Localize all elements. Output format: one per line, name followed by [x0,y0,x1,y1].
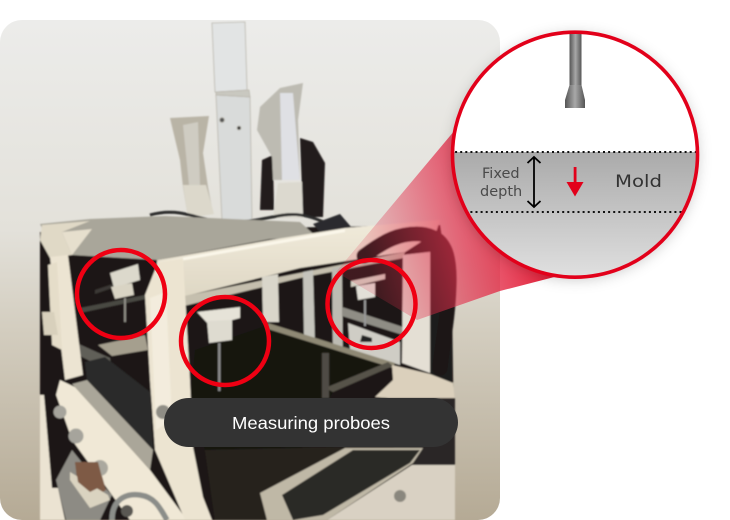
label: mold: Mold [615,172,662,192]
center post [145,258,212,520]
hoses on top [148,210,324,222]
left post [50,255,83,380]
circle: probe 1 [77,250,165,338]
center mold [190,323,395,450]
magnified detail circle [450,32,700,282]
left bag [170,116,214,218]
drag chain [260,138,325,217]
cable loop [364,234,449,368]
right bag [257,83,303,218]
floor right [375,365,455,402]
probe [565,32,585,108]
red down arrow [566,167,584,196]
top plate [40,216,318,260]
label: fixed depth: Fixed [482,166,520,182]
lower right mold [205,447,455,520]
central tower [212,22,252,220]
mold block [450,152,700,282]
bolts and bracket [54,406,167,520]
machine dark body [40,225,455,520]
red zoom cone [336,130,566,320]
caption pill [164,398,458,447]
caption pill: Measuring proboes [232,413,390,433]
sensor boxes [110,264,385,391]
circle: probe 3 [328,260,416,348]
depth arrow [528,157,540,207]
circle: probe 2 [181,297,269,385]
label: fixed depth: depth [480,184,522,200]
middle windows [262,266,403,372]
photo card [0,20,500,520]
front beam [157,220,440,300]
dotted mold surface [450,151,700,153]
dotted depth line [470,211,682,213]
left mold [85,357,153,450]
left notch [40,385,80,490]
low wall [56,380,187,520]
red highlight circles [77,250,416,385]
machine photo illustration [40,22,455,520]
left interior rails [79,276,148,362]
right pillar [402,252,430,373]
